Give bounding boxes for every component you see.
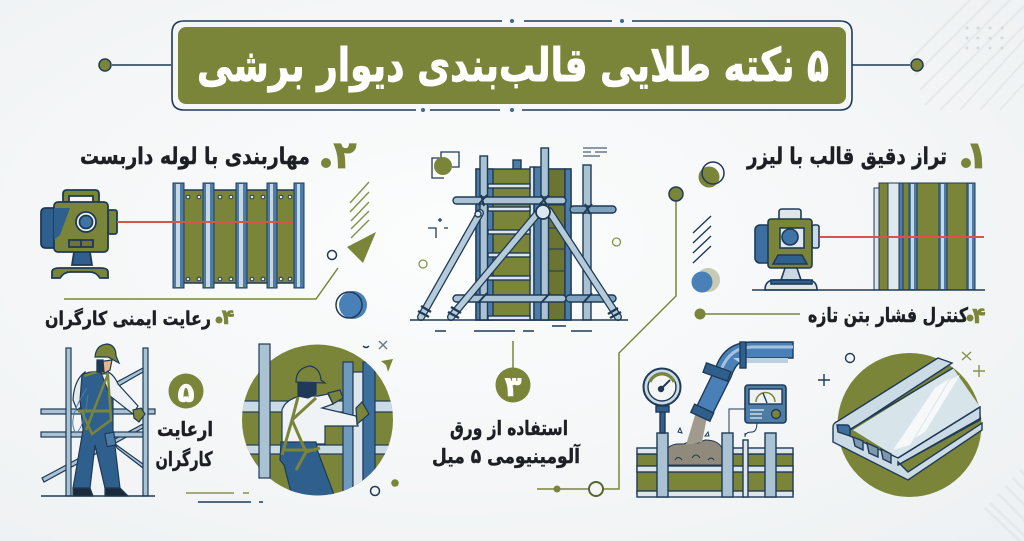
worker on scaffold left [41,344,155,496]
title banner [99,19,923,112]
laser beam right [820,236,984,238]
connector and decoration left [64,182,376,319]
centre decorations [419,148,620,268]
section 2 heading: ۲ [333,133,357,177]
step 5 text: ارعایت [157,417,213,441]
step 5 text: کارگران [156,447,213,471]
formwork right [752,183,985,290]
laser beam left [117,221,293,223]
decorative hatch corners [910,0,1024,541]
step 5 badge: ۵ [177,376,195,409]
step 3 badge: ۳ [504,370,522,403]
step 3 badge [496,341,530,403]
worker circle illustration [240,344,395,500]
aluminium profile illustration [818,352,985,497]
section 2 heading [80,133,357,177]
step 5 text [156,417,213,471]
step 3 text: آلومینیومی ۵ میل [432,443,581,468]
pressure meter [729,385,786,437]
section 4 heading left: رعایت ایمنی کارگران [45,307,211,330]
concrete pour illustration [637,342,793,497]
pressure gauge [644,368,680,433]
section 1 heading [746,133,989,177]
section 1 heading: تراز دقیق قالب با لیزر [746,144,947,170]
section 4 heading left: ۴ [222,305,235,329]
laser level right [755,209,819,290]
small decorations bottom left [186,341,399,502]
formwork left [117,183,304,288]
step 5 badge [168,374,204,409]
scaffold tubes [418,148,621,320]
section 4 heading right: ۴ [972,304,986,329]
title text: ۵ نکته طلایی قالب‌بندی دیوار برشی [197,38,829,92]
section 1 heading: ۱ [965,133,989,177]
scaffold and aluminium wall centre [410,148,628,331]
laser level left [41,190,117,278]
step 3 text: استفاده از ورق [450,416,568,440]
connector and decoration right [537,162,800,496]
section 4 heading right: کنترل فشار بتن تازه [808,303,968,327]
section 2 heading: مهاربندی با لوله داربست [80,144,310,170]
step 3 text [432,416,581,468]
